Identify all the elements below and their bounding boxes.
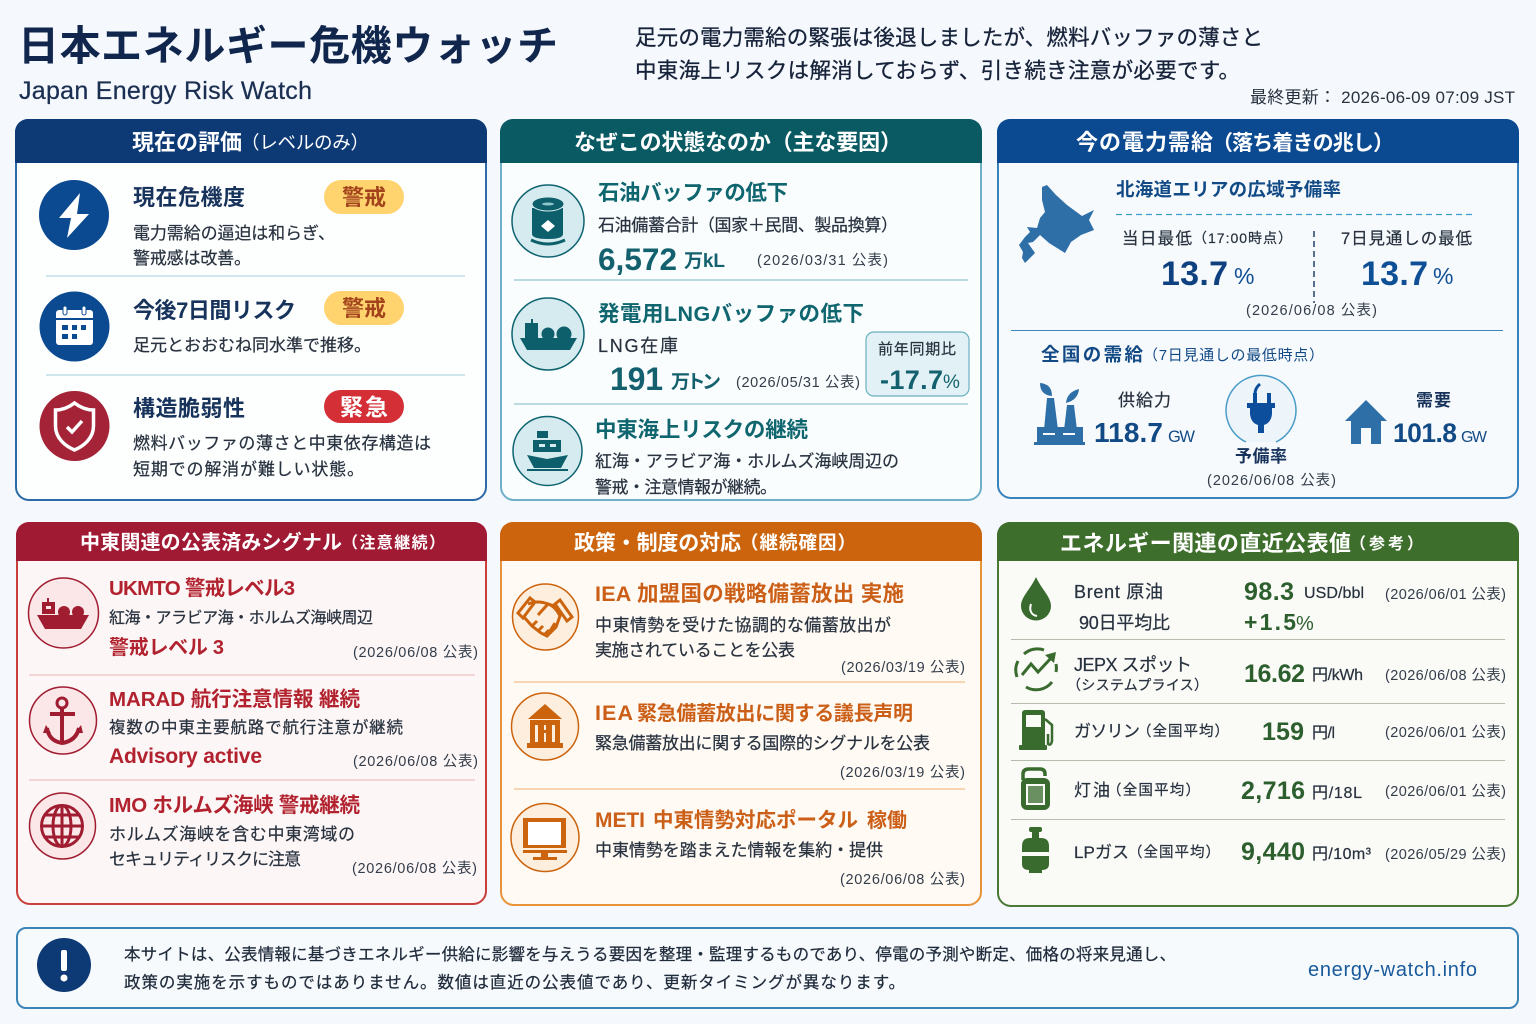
item: LNG buffer: LNG在庫 bbox=[598, 336, 678, 356]
item: IEA stock release bbox=[512, 582, 965, 676]
heading: 政策・制度の対応 bbox=[574, 532, 741, 555]
row: JEPX: (2026/06/08 公表) bbox=[1385, 667, 1506, 684]
item: UKMTO: (2026/06/08 公表) bbox=[353, 644, 478, 661]
icon: factory bbox=[1034, 383, 1085, 445]
callout: year on year: 前年同期比 bbox=[878, 341, 956, 358]
icon: anchor bbox=[30, 687, 96, 754]
row: Brent: 98.3 bbox=[1244, 578, 1294, 606]
item: IEA statement bbox=[512, 693, 965, 781]
title block bbox=[18, 23, 558, 105]
row: LP gas: (2026/05/29 公表) bbox=[1385, 846, 1506, 863]
heading: （レベルのみ） bbox=[241, 132, 369, 153]
row: gasoline: ガソリン bbox=[1074, 722, 1140, 741]
item: IMO: セキュリティリスクに注意 bbox=[109, 850, 301, 869]
callout: year on year: % bbox=[943, 372, 960, 393]
heading: METI portal bbox=[595, 809, 907, 832]
metric: LNG stock: (2026/05/31 公表) bbox=[736, 374, 860, 391]
icon: ship bbox=[513, 416, 582, 486]
row: Brent: % bbox=[1296, 613, 1314, 635]
metric: LNG stock bbox=[610, 361, 860, 397]
badge: alert: 警戒 bbox=[342, 296, 386, 321]
row: gasoline: 159 bbox=[1262, 718, 1304, 746]
metric: 7-day minimum: 7日見通しの最低 bbox=[1341, 229, 1472, 248]
heading: （注意継続） bbox=[342, 534, 445, 552]
row: LP gas: （全国平均） bbox=[1128, 844, 1220, 861]
item: IMO: IMO ホルムズ海峡 警戒継続 bbox=[109, 793, 360, 817]
row: gasoline bbox=[1019, 710, 1506, 750]
item: structural vulnerability bbox=[40, 390, 431, 479]
item: MARAD: MARAD 航行注意情報 継続 bbox=[109, 688, 360, 711]
metric: 7-day minimum: % bbox=[1433, 263, 1453, 289]
metric: demand: 需要 bbox=[1416, 391, 1451, 410]
heading: （参考） bbox=[1350, 535, 1423, 553]
row: Brent: Brent 原油 bbox=[1074, 582, 1163, 602]
icon: monitor bbox=[511, 804, 579, 872]
metric: LNG stock: 191 bbox=[610, 361, 663, 397]
metric: oil reserve: (2026/03/31 公表) bbox=[757, 252, 888, 269]
metric: supply: 118.7 bbox=[1094, 417, 1163, 448]
item: METI portal: 中東情勢を踏まえた情報を集約・提供 bbox=[595, 841, 883, 860]
heading: エネルギー関連の直近公表値 bbox=[1060, 531, 1351, 556]
heading: METI portal: METI bbox=[595, 809, 645, 832]
section: Hokkaido reserve: (2026/06/08 公表) bbox=[1246, 302, 1377, 319]
metric: same-day minimum bbox=[1122, 229, 1292, 293]
metric: 7-day minimum bbox=[1341, 229, 1472, 293]
heading bbox=[574, 532, 856, 555]
callout: year on year bbox=[866, 332, 969, 396]
metric: demand: 101.8 bbox=[1393, 418, 1457, 448]
heading: METI portal: 稼働 bbox=[867, 809, 907, 832]
item: current crisis level bbox=[39, 180, 404, 268]
icon: oil barrel bbox=[512, 185, 584, 257]
callout: year on year: -17.7 bbox=[880, 365, 943, 395]
metric: same-day minimum: % bbox=[1234, 263, 1254, 289]
row: Brent bbox=[1021, 577, 1506, 635]
item: Middle East maritime risk bbox=[513, 416, 899, 497]
row: gasoline: 円/l bbox=[1312, 725, 1335, 742]
item: IMO: (2026/06/08 公表) bbox=[352, 860, 477, 877]
metric: supply: 供給力 bbox=[1118, 391, 1171, 410]
row: Brent: USD/bbl bbox=[1304, 585, 1364, 602]
item: structural vulnerability: 燃料バッファの薄さと中東依存構造は bbox=[133, 434, 431, 453]
row: kerosene bbox=[1021, 769, 1506, 810]
last updated: 最終更新： 2026-06-09 07:09 JST bbox=[1250, 88, 1515, 107]
panel: energy figures bbox=[997, 522, 1519, 906]
row: JEPX: JEPX スポット bbox=[1074, 655, 1192, 675]
icon: exclamation bbox=[37, 938, 91, 992]
metric: same-day minimum: 13.7 bbox=[1161, 255, 1228, 293]
icon: handshake bbox=[512, 584, 578, 650]
section: national supply and demand: (2026/06/08 公表) bbox=[1207, 472, 1336, 489]
icon: shield bbox=[40, 391, 110, 461]
row: LP gas: LPガス bbox=[1074, 843, 1129, 862]
heading: （落ち着きの兆し） bbox=[1212, 132, 1394, 155]
item: IMO: ホルムズ海峡を含む中東湾域の bbox=[109, 825, 355, 844]
icon: oil drop bbox=[1021, 577, 1051, 620]
row: Brent: 90日平均比 bbox=[1079, 613, 1170, 633]
item: Middle East maritime risk: 警戒・注意情報が継続。 bbox=[595, 478, 777, 497]
lead summary text: 中東海上リスクは解消しておらず、引き続き注意が必要です。 bbox=[635, 59, 1240, 83]
heading: IEA statement: 緊急備蓄放出に関する議長声明 bbox=[637, 702, 913, 725]
item: IEA statement: (2026/03/19 公表) bbox=[840, 764, 965, 781]
heading: （継続確因） bbox=[740, 532, 856, 553]
row: LP gas: 9,440 bbox=[1241, 838, 1305, 866]
disclaimer text: 本サイトは、公表情報に基づきエネルギー供給に影響を与えうる要因を整理・監理するものであり、停電の予測や断定、価格の将来見通し、 bbox=[124, 945, 1176, 964]
row: gasoline: （全国平均） bbox=[1137, 723, 1229, 740]
badge: alert: 警戒 bbox=[342, 185, 386, 210]
icon: globe bbox=[30, 793, 96, 859]
row: kerosene: 2,716 bbox=[1241, 777, 1305, 805]
section: national supply and demand: 全国の需給 bbox=[1041, 344, 1143, 365]
item: Middle East maritime risk: 中東海上リスクの継続 bbox=[595, 418, 808, 442]
panel: disclaimer footer bbox=[17, 928, 1518, 1008]
item: IEA stock release: (2026/03/19 公表) bbox=[841, 659, 965, 676]
metric: 7-day minimum: 13.7 bbox=[1361, 255, 1428, 293]
disclaimer text: 政策の実施を示すものではありません。数値は直近の公表値であり、更新タイミングが異なります。 bbox=[124, 973, 905, 992]
row: kerosene: （全国平均） bbox=[1107, 782, 1200, 799]
heading: なぜこの状態なのか（主な要因） bbox=[574, 130, 902, 155]
item: MARAD bbox=[30, 687, 478, 770]
row: Brent: +1.5 bbox=[1244, 609, 1296, 635]
row: JEPX: 16.62 bbox=[1244, 660, 1305, 688]
panel: Middle East signals bbox=[16, 522, 487, 904]
row: LP gas: 円/10m³ bbox=[1312, 846, 1372, 863]
item: IEA stock release: IEA 加盟国の戦略備蓄放出 実施 bbox=[595, 582, 904, 606]
item: 7 day risk bbox=[40, 291, 404, 362]
subtitle: Japan Energy Risk Watch bbox=[19, 77, 312, 105]
item: MARAD: (2026/06/08 公表) bbox=[353, 753, 478, 770]
icon: kerosene can bbox=[1021, 769, 1050, 810]
item: Middle East maritime risk: 紅海・アラビア海・ホルムズ海峡周辺の bbox=[595, 452, 899, 471]
item: IMO bbox=[30, 793, 477, 877]
heading: 中東関連の公表済みシグナル bbox=[80, 530, 342, 554]
item: LNG buffer: 発電用LNGバッファの低下 bbox=[598, 302, 864, 326]
metric: same-day minimum: （17:00時点） bbox=[1193, 230, 1292, 246]
row: kerosene: 灯油 bbox=[1074, 781, 1110, 800]
metric: supply bbox=[1094, 391, 1195, 448]
icon: house bbox=[1345, 400, 1387, 444]
row: JEPX: 円/kWh bbox=[1312, 667, 1363, 684]
item: MARAD: 複数の中東主要航路で航行注意が継続 bbox=[109, 718, 404, 737]
icon: Hokkaido map bbox=[1019, 185, 1094, 263]
item: LNG buffer bbox=[512, 298, 969, 397]
metric: demand bbox=[1393, 391, 1488, 448]
heading: 今の電力需給 bbox=[1076, 130, 1213, 155]
heading: IEA statement: IEA bbox=[595, 701, 633, 725]
item: current crisis level: 電力需給の逼迫は和らぎ、 bbox=[133, 224, 335, 243]
item: structural vulnerability: 短期での解消が難しい状態。 bbox=[133, 460, 364, 479]
row: gasoline: (2026/06/01 公表) bbox=[1385, 724, 1506, 741]
icon: tanker bbox=[28, 578, 98, 648]
badge: emergency: 緊急 bbox=[340, 394, 388, 420]
item: IEA stock release: 実施されていることを公表 bbox=[595, 641, 795, 660]
metric: oil reserve bbox=[598, 241, 888, 277]
icon: institution bbox=[512, 693, 578, 760]
item: IEA stock release: 中東情勢を受けた協調的な備蓄放出が bbox=[595, 616, 891, 635]
item: UKMTO bbox=[28, 577, 478, 661]
row: JEPX: （システムプライス） bbox=[1067, 677, 1208, 693]
metric: oil reserve: 6,572 bbox=[598, 241, 677, 277]
metric: LNG stock: 万トン bbox=[671, 372, 721, 393]
heading: METI portal: 中東情勢対応ポータル bbox=[653, 809, 858, 832]
icon: price trend bbox=[1016, 649, 1056, 690]
row: kerosene: 円/18L bbox=[1312, 785, 1362, 802]
badge: emergency bbox=[324, 390, 404, 423]
panel: power supply bbox=[997, 119, 1519, 498]
heading bbox=[1076, 130, 1394, 155]
item: METI portal bbox=[511, 804, 965, 888]
item: IEA statement: 緊急備蓄放出に関する国際的シグナルを公表 bbox=[595, 734, 930, 753]
row: JEPX bbox=[1016, 649, 1506, 693]
metric: same-day minimum: 当日最低 bbox=[1122, 229, 1192, 248]
row: kerosene: (2026/06/01 公表) bbox=[1385, 783, 1506, 800]
lead summary text: 足元の電力需給の緊張は後退しましたが、燃料バッファの薄さと bbox=[635, 26, 1263, 50]
section: Hokkaido reserve bbox=[1019, 179, 1476, 319]
disclaimer text bbox=[124, 945, 1176, 992]
panel: current assessment bbox=[15, 119, 487, 500]
section: Hokkaido reserve: 北海道エリアの広域予備率 bbox=[1116, 179, 1341, 200]
row: Brent: (2026/06/01 公表) bbox=[1385, 586, 1506, 603]
metric: supply: GW bbox=[1168, 428, 1195, 446]
section: national supply and demand bbox=[1034, 344, 1488, 489]
panel: causes bbox=[500, 119, 982, 500]
metric: oil reserve: 万kL bbox=[684, 251, 725, 272]
item: UKMTO: 警戒レベル 3 bbox=[109, 636, 224, 659]
item: MARAD: Advisory active bbox=[109, 745, 262, 768]
item: current crisis level: 警戒感は改善。 bbox=[133, 249, 251, 268]
icon: gas cylinder bbox=[1022, 827, 1049, 873]
item: 7 day risk: 今後7日間リスク bbox=[133, 298, 296, 323]
badge: alert bbox=[324, 291, 404, 325]
icon: lightning bbox=[39, 180, 109, 250]
icon: LNG carrier bbox=[512, 298, 584, 370]
site url: energy-watch.info bbox=[1308, 959, 1477, 981]
icon: calendar bbox=[40, 292, 110, 362]
item: oil buffer: 石油備蓄合計（国家＋民間、製品換算） bbox=[598, 216, 898, 235]
item: oil buffer bbox=[512, 181, 898, 277]
panel: policy response bbox=[500, 522, 982, 905]
item: oil buffer: 石油バッファの低下 bbox=[598, 181, 788, 205]
title: 日本エネルギー危機ウォッチ bbox=[18, 23, 558, 69]
icon: plug bbox=[1226, 375, 1296, 442]
heading bbox=[132, 130, 369, 155]
item: structural vulnerability: 構造脆弱性 bbox=[133, 396, 245, 421]
item: METI portal: (2026/06/08 公表) bbox=[840, 871, 965, 888]
heading: 現在の評価 bbox=[132, 130, 242, 155]
icon: fuel pump bbox=[1019, 710, 1052, 750]
heading bbox=[80, 530, 445, 554]
item: UKMTO: 紅海・アラビア海・ホルムズ海峡周辺 bbox=[109, 609, 373, 627]
metric: demand: GW bbox=[1461, 429, 1488, 446]
lead summary text bbox=[635, 26, 1263, 83]
metric: reserve: 予備率 bbox=[1235, 447, 1287, 466]
badge: alert bbox=[324, 180, 404, 214]
item: 7 day risk: 足元とおおむね同水準で推移。 bbox=[133, 336, 371, 355]
row: LP gas bbox=[1022, 827, 1506, 873]
section: national supply and demand: （7日見通しの最低時点） bbox=[1143, 347, 1324, 364]
item: UKMTO: UKMTO 警戒レベル3 bbox=[109, 577, 295, 600]
item: current crisis level: 現在危機度 bbox=[133, 185, 245, 210]
